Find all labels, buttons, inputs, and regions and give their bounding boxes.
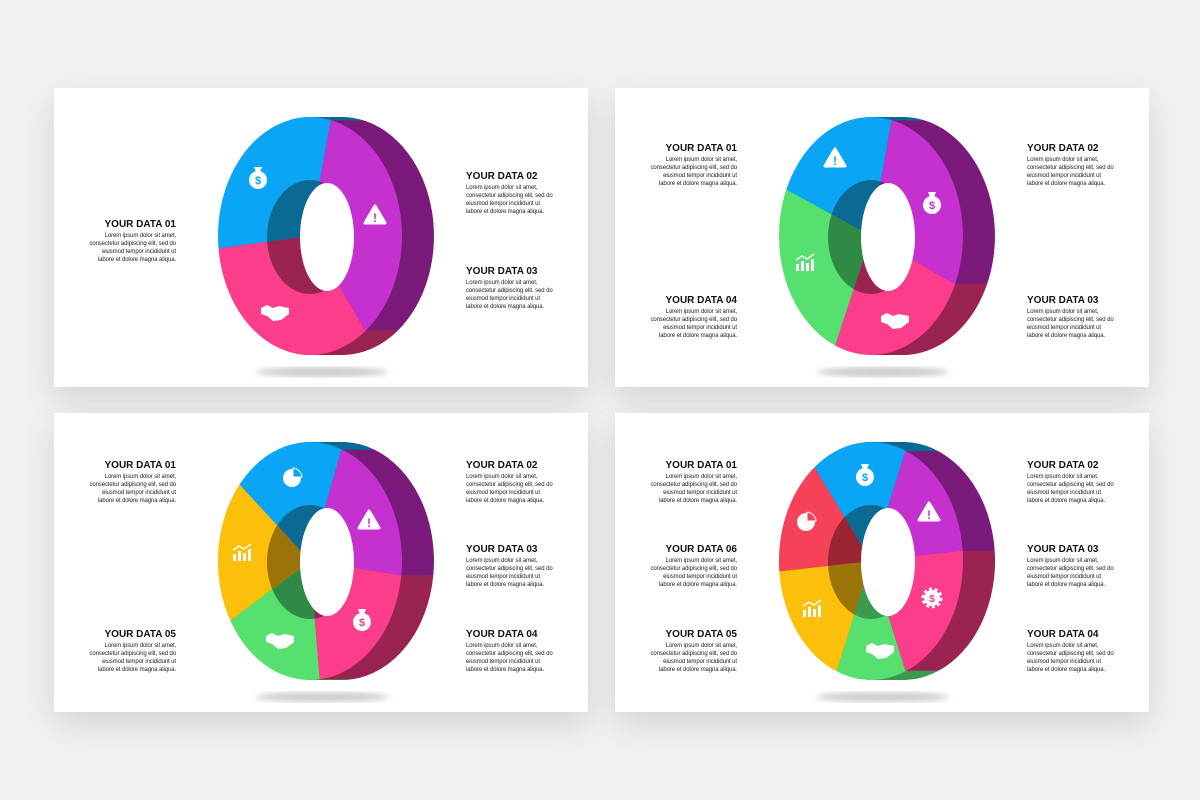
- text: P4 data 01: Lorem ipsum dolor sit amet,: [666, 474, 737, 480]
- text: P4 data 05: [650, 629, 737, 673]
- text: P4 data 06: YOUR DATA 06: [666, 544, 737, 555]
- text: P2 data 02: consectetur adipiscing elit, sed do: [1027, 165, 1114, 171]
- text: P3 data 01: labore et dolore magna aliqua.: [98, 498, 176, 504]
- text: P1 data 03: consectetur adipiscing elit, sed do: [466, 288, 553, 294]
- text: P3 data 01: eiusmod tempor incididunt ut: [102, 490, 176, 496]
- text: P2 data 03: labore et dolore magna aliqua.: [1027, 333, 1105, 339]
- text: P3 data 03: Lorem ipsum dolor sit amet,: [466, 558, 537, 564]
- chart: ring 1 (3 segments): [218, 117, 434, 377]
- text: P1 data 02: labore et dolore magna aliqua.: [466, 209, 544, 215]
- text: P1 data 01: labore et dolore magna aliqua.: [98, 257, 176, 263]
- text: P4 data 03: Lorem ipsum dolor sit amet,: [1027, 558, 1098, 564]
- text: P4 data 06: labore et dolore magna aliqua.: [659, 582, 737, 588]
- text: P4 data 02: eiusmod tempor incididunt ut: [1027, 490, 1101, 496]
- text: P4 data 04: eiusmod tempor incididunt ut: [1027, 659, 1101, 665]
- text: P3 data 03: YOUR DATA 03: [466, 544, 538, 555]
- text: P2 data 04: [650, 295, 737, 339]
- text: P3 data 01: YOUR DATA 01: [104, 460, 176, 471]
- text: P3 data 04: eiusmod tempor incididunt ut: [466, 659, 540, 665]
- text: P3 data 04: labore et dolore magna aliqua.: [466, 667, 544, 673]
- text: P4 data 06: eiusmod tempor incididunt ut: [663, 574, 737, 580]
- text: P1 data 03: Lorem ipsum dolor sit amet,: [466, 280, 537, 286]
- text: P1 data 02: eiusmod tempor incididunt ut: [466, 201, 540, 207]
- text: P1 data 02: [466, 171, 553, 215]
- text: P4 data 06: Lorem ipsum dolor sit amet,: [666, 558, 737, 564]
- text: P3 data 02: labore et dolore magna aliqua.: [466, 498, 544, 504]
- chart: ring 2 (4 segments): [779, 117, 995, 377]
- text: P3 data 03: eiusmod tempor incididunt ut: [466, 574, 540, 580]
- text: P4 data 04: Lorem ipsum dolor sit amet,: [1027, 643, 1098, 649]
- text: P3 data 04: Lorem ipsum dolor sit amet,: [466, 643, 537, 649]
- text: P3 data 03: [466, 544, 553, 588]
- text: P4 data 05: consectetur adipiscing elit, sed do: [650, 651, 737, 657]
- text: P1 data 01: eiusmod tempor incididunt ut: [102, 249, 176, 255]
- panel: bottom-left: [54, 413, 588, 712]
- ring charts: [218, 117, 996, 703]
- text: P4 data 02: YOUR DATA 02: [1027, 460, 1098, 471]
- text: P4 data 05: YOUR DATA 05: [666, 629, 737, 640]
- text: P1 data 01: YOUR DATA 01: [104, 219, 176, 230]
- text: P4 data 02: Lorem ipsum dolor sit amet,: [1027, 474, 1098, 480]
- text: P3 data 03: labore et dolore magna aliqua.: [466, 582, 544, 588]
- text: P4 data 06: consectetur adipiscing elit, sed do: [650, 566, 737, 572]
- text: P3 data 01: Lorem ipsum dolor sit amet,: [105, 474, 176, 480]
- text: P3 data 02: eiusmod tempor incididunt ut: [466, 490, 540, 496]
- panel: bottom-right: [615, 413, 1149, 712]
- chart: ring 4 (6 segments): [779, 442, 995, 702]
- text: P4 data 02: consectetur adipiscing elit, sed do: [1027, 482, 1114, 488]
- text: P2 data 04: YOUR DATA 04: [666, 295, 737, 306]
- text: P3 data 04: consectetur adipiscing elit, sed do: [466, 651, 553, 657]
- text: P4 data 06: [650, 544, 737, 588]
- text: P2 data 02: [1027, 143, 1114, 187]
- text: P4 data 03: consectetur adipiscing elit, sed do: [1027, 566, 1114, 572]
- text: P4 data 05: eiusmod tempor incididunt ut: [663, 659, 737, 665]
- text: P4 data 01: consectetur adipiscing elit, sed do: [650, 482, 737, 488]
- text: P2 data 01: [650, 143, 737, 187]
- text: P2 data 02: Lorem ipsum dolor sit amet,: [1027, 157, 1098, 163]
- text: P2 data 01: Lorem ipsum dolor sit amet,: [666, 157, 737, 163]
- text: P2 data 03: YOUR DATA 03: [1027, 295, 1098, 306]
- text: P2 data 04: Lorem ipsum dolor sit amet,: [666, 309, 737, 315]
- text: P2 data 04: labore et dolore magna aliqua.: [659, 333, 737, 339]
- panel: top-left: [54, 88, 588, 387]
- text: P4 data 04: labore et dolore magna aliqua.: [1027, 667, 1105, 673]
- text: P2 data 01: consectetur adipiscing elit, sed do: [650, 165, 737, 171]
- text: P2 data 04: eiusmod tempor incididunt ut: [663, 325, 737, 331]
- text: P3 data 04: YOUR DATA 04: [466, 629, 538, 640]
- text: P4 data 03: labore et dolore magna aliqua.: [1027, 582, 1105, 588]
- text: P2 data 01: labore et dolore magna aliqua.: [659, 181, 737, 187]
- text: P4 data 04: YOUR DATA 04: [1027, 629, 1098, 640]
- text: P4 data 03: eiusmod tempor incididunt ut: [1027, 574, 1101, 580]
- text: P2 data 02: labore et dolore magna aliqua.: [1027, 181, 1105, 187]
- text: P4 data 02: [1027, 460, 1114, 504]
- text: P4 data 01: eiusmod tempor incididunt ut: [663, 490, 737, 496]
- text: P3 data 01: consectetur adipiscing elit, sed do: [89, 482, 176, 488]
- panel: top-right: [615, 88, 1149, 387]
- text: P3 data 05: labore et dolore magna aliqua.: [98, 667, 176, 673]
- text: P2 data 02: YOUR DATA 02: [1027, 143, 1098, 154]
- text: P3 data 02: [466, 460, 553, 504]
- chart: ring 3 (5 segments): [218, 442, 434, 702]
- text: P1 data 03: labore et dolore magna aliqua.: [466, 304, 544, 310]
- text: P1 data 03: YOUR DATA 03: [466, 266, 538, 277]
- text: P2 data 03: Lorem ipsum dolor sit amet,: [1027, 309, 1098, 315]
- text: P4 data 02: labore et dolore magna aliqua.: [1027, 498, 1105, 504]
- text: P4 data 04: [1027, 629, 1114, 673]
- text: P3 data 05: consectetur adipiscing elit, sed do: [89, 651, 176, 657]
- text: P4 data 05: Lorem ipsum dolor sit amet,: [666, 643, 737, 649]
- text: P3 data 05: YOUR DATA 05: [104, 629, 176, 640]
- text: P1 data 02: Lorem ipsum dolor sit amet,: [466, 185, 537, 191]
- text: P2 data 03: [1027, 295, 1114, 339]
- text: P3 data 02: YOUR DATA 02: [466, 460, 538, 471]
- text: P3 data 03: consectetur adipiscing elit, sed do: [466, 566, 553, 572]
- text: P1 data 02: consectetur adipiscing elit, sed do: [466, 193, 553, 199]
- text: P2 data 02: eiusmod tempor incididunt ut: [1027, 173, 1101, 179]
- text: P3 data 01: [89, 460, 176, 504]
- text: P3 data 02: Lorem ipsum dolor sit amet,: [466, 474, 537, 480]
- text: P4 data 01: YOUR DATA 01: [666, 460, 737, 471]
- text: P2 data 03: eiusmod tempor incididunt ut: [1027, 325, 1101, 331]
- text: P1 data 02: YOUR DATA 02: [466, 171, 538, 182]
- text: P3 data 02: consectetur adipiscing elit, sed do: [466, 482, 553, 488]
- text: P4 data 03: [1027, 544, 1114, 588]
- text: P1 data 03: eiusmod tempor incididunt ut: [466, 296, 540, 302]
- text: P4 data 01: [650, 460, 737, 504]
- text: P4 data 04: consectetur adipiscing elit, sed do: [1027, 651, 1114, 657]
- text: P3 data 05: eiusmod tempor incididunt ut: [102, 659, 176, 665]
- text: P3 data 04: [466, 629, 553, 673]
- text: P2 data 03: consectetur adipiscing elit, sed do: [1027, 317, 1114, 323]
- text: P1 data 03: [466, 266, 553, 310]
- text: P2 data 01: eiusmod tempor incididunt ut: [663, 173, 737, 179]
- text: P4 data 03: YOUR DATA 03: [1027, 544, 1098, 555]
- text: P4 data 05: labore et dolore magna aliqua.: [659, 667, 737, 673]
- text: P1 data 01: [89, 219, 176, 263]
- text: P2 data 04: consectetur adipiscing elit, sed do: [650, 317, 737, 323]
- text: P4 data 01: labore et dolore magna aliqua.: [659, 498, 737, 504]
- text: P1 data 01: Lorem ipsum dolor sit amet,: [105, 233, 176, 239]
- text: P1 data 01: consectetur adipiscing elit, sed do: [89, 241, 176, 247]
- text: P3 data 05: [89, 629, 176, 673]
- text: P3 data 05: Lorem ipsum dolor sit amet,: [105, 643, 176, 649]
- text: P2 data 01: YOUR DATA 01: [666, 143, 737, 154]
